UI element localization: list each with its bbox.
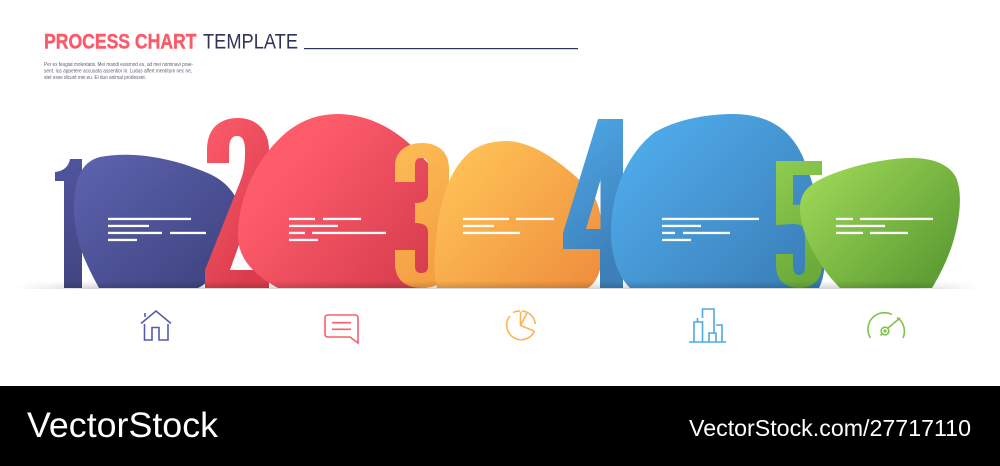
blob 5 (800, 158, 960, 288)
icon: pie chart (507, 311, 535, 340)
footer bar (0, 386, 1000, 466)
intro text block: sent. Ius appetere accusata assentior in. Ludus affert mentitum nec ne, (44, 68, 192, 74)
title: TEMPLATE (203, 30, 298, 54)
blob 2 text lines (289, 218, 386, 241)
step 5: numeral and blob (776, 158, 960, 288)
step 1: numeral and blob (55, 155, 235, 288)
icon: speedometer gauge (868, 313, 904, 338)
blob 3 (434, 141, 603, 288)
blob 3 text lines (463, 218, 554, 234)
intro text block: Per ex feugiat molestatis. Mei mandi euismod eu, ad mei nominavi prae- (44, 62, 193, 68)
blob 2 (238, 114, 449, 288)
icon: city buildings (689, 309, 726, 342)
brand name: VectorStock (27, 406, 219, 445)
icon: house (141, 311, 171, 340)
step 3: numeral and blob (395, 141, 603, 288)
numeral 5 (776, 161, 822, 288)
intro text block (44, 62, 193, 81)
floor shadow (30, 282, 964, 289)
blob 4 (611, 114, 825, 288)
blob 4 text lines (662, 218, 759, 241)
blob 1 text lines (108, 218, 206, 241)
blob 1 (74, 155, 235, 288)
blob 5 text lines (836, 218, 933, 234)
numeral 4 (563, 119, 623, 288)
title: PROCESS CHART (44, 30, 197, 54)
step 2: numeral and blob (205, 114, 449, 288)
step 4: numeral and blob (563, 114, 825, 288)
icon: chat bubble (325, 315, 358, 343)
numeral 3 (395, 143, 449, 288)
title (44, 30, 578, 54)
intro text block: stet esse dicunt mei eu. Ei duo animal prodesset. (44, 75, 146, 81)
numeral 1 (55, 159, 82, 288)
image url: VectorStock.com/27717110 (689, 415, 971, 441)
numeral 2 (205, 118, 269, 288)
